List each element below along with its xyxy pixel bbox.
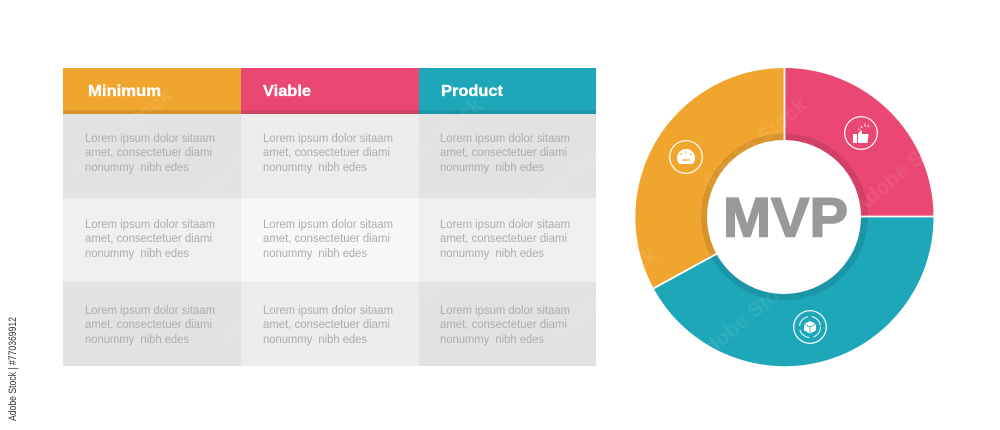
text block: row 1 column 1: amet, consectetuer diami [85,145,212,159]
text block: row 2 column 3: nonummy nibh edes [440,246,544,260]
text block: row 3 column 1: nonummy nibh edes [85,332,189,346]
text block: row 3 column 3 [440,303,570,346]
text block: row 1 column 3: nonummy nibh edes [440,160,544,174]
centre circle [707,140,861,294]
text block: row 2 column 2: nonummy nibh edes [263,246,367,260]
watermark: Adobe Stock [548,244,662,344]
text block: row 3 column 3: nonummy nibh edes [440,332,544,346]
text block: row 1 column 1 [85,131,215,174]
watermark: Adobe Stock [173,124,287,224]
icon: rotating box [794,311,826,343]
header: Product [419,68,596,114]
text block: row 1 column 3: amet, consectetuer diami [440,145,567,159]
panel: table [63,68,596,366]
text block: row 2 column 3: amet, consectetuer diami [440,231,567,245]
segment: Viable [784,68,934,217]
text block: row 2 column 3 [440,217,570,260]
text block: row 1 column 2: Lorem ipsum dolor sitaam [263,131,393,145]
text block: row 3 column 2 [263,303,393,346]
segment: Product [654,217,934,366]
watermark: Adobe Stock [698,94,812,194]
watermark: Adobe Stock [688,269,802,369]
donut chart [635,67,934,366]
text block: row 3 column 2: amet, consectetuer diami [263,317,390,331]
header: Product: Product [441,83,503,100]
text block: row 3 column 1: amet, consectetuer diami [85,317,212,331]
segment separators [653,67,934,289]
header: Minimum [63,68,241,114]
text block: row 3 column 3: amet, consectetuer diami [440,317,567,331]
text block: row 3 column 1 [85,303,215,346]
inner shadow ring [704,137,864,297]
text block: row 2 column 3: Lorem ipsum dolor sitaam [440,217,570,231]
side credit text: Adobe Stock | #770369912 [7,317,19,421]
text block: row 2 column 1 [85,217,215,260]
text block: row 3 column 1: Lorem ipsum dolor sitaam [85,303,215,317]
header: Minimum: Minimum [88,83,161,100]
text block: row 1 column 2: amet, consectetuer diami [263,145,390,159]
watermark: Adobe Stock [848,119,962,219]
text block: row 2 column 2: Lorem ipsum dolor sitaam [263,217,393,231]
segment: Minimum [635,68,784,288]
text block: row 1 column 1: Lorem ipsum dolor sitaam [85,131,215,145]
watermark: Adobe Stock [373,94,487,194]
header: Viable: Viable [263,83,311,100]
watermark: Adobe Stock [218,249,332,349]
text block: row 3 column 2: nonummy nibh edes [263,332,367,346]
text block: row 2 column 1: nonummy nibh edes [85,246,189,260]
icon: speedometer [670,141,702,173]
text block: row 2 column 2: amet, consectetuer diami [263,231,390,245]
watermark: Adobe Stock [338,269,452,369]
text block: row 1 column 2 [263,131,393,174]
text block: row 3 column 2: Lorem ipsum dolor sitaam [263,303,393,317]
table body cells [63,114,596,366]
text block: row 1 column 1: nonummy nibh edes [85,160,189,174]
watermark [63,84,962,369]
text block: row 3 column 3: Lorem ipsum dolor sitaam [440,303,570,317]
text block: row 1 column 3 [440,131,570,174]
watermark: Adobe Stock [508,129,622,229]
watermark: Adobe Stock [63,84,177,184]
text block: row 2 column 1: Lorem ipsum dolor sitaam [85,217,215,231]
centre label MVP: MVP [723,186,848,248]
text block: row 2 column 1: amet, consectetuer diami [85,231,212,245]
text block: row 1 column 2: nonummy nibh edes [263,160,367,174]
text block: row 1 column 3: Lorem ipsum dolor sitaam [440,131,570,145]
header: Viable [241,68,419,114]
text block: row 2 column 2 [263,217,393,260]
icon: thumbs up [845,117,877,149]
